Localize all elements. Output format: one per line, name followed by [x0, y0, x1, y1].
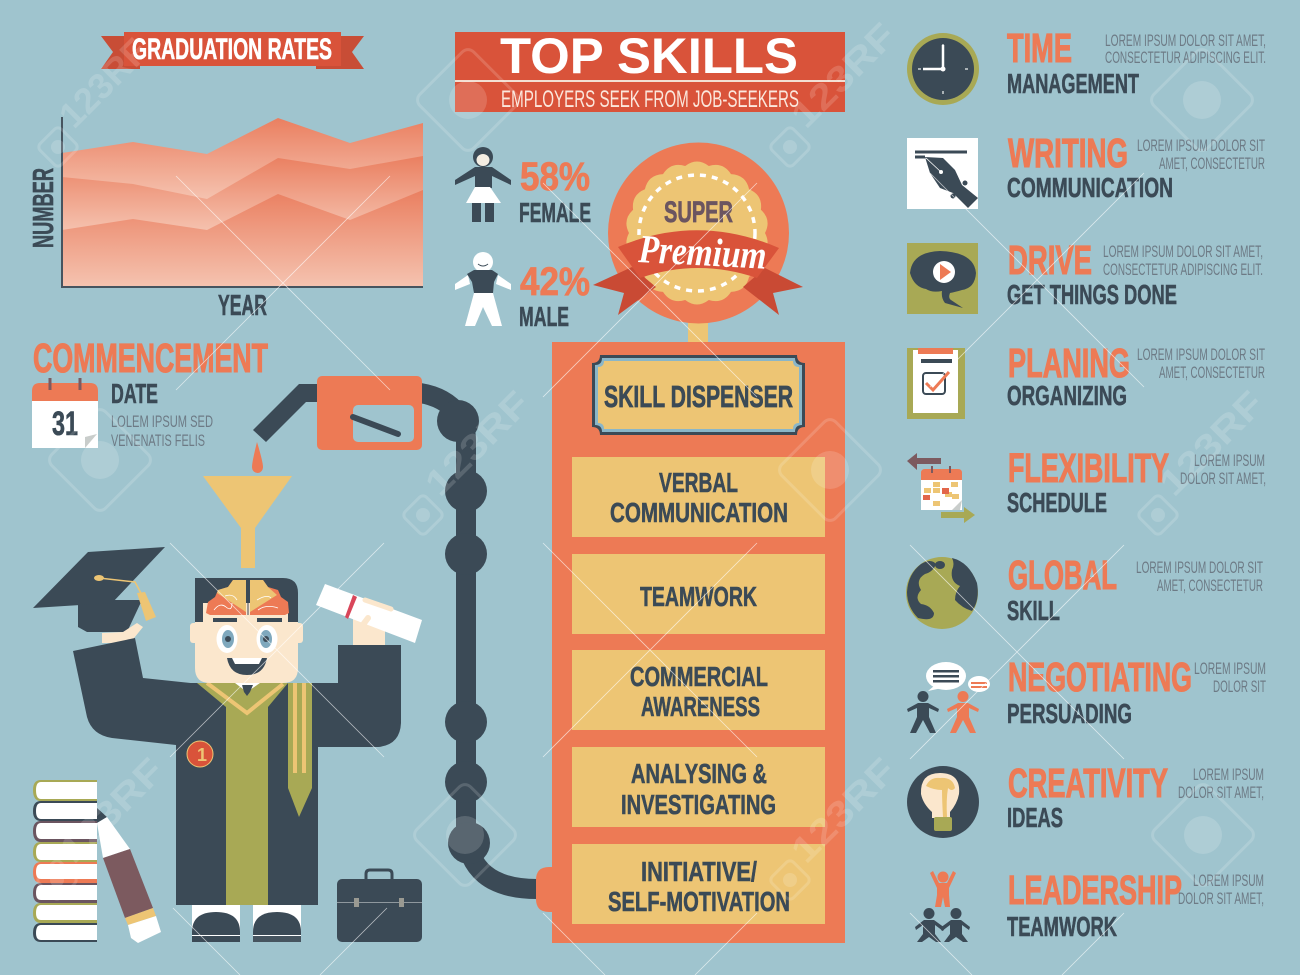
skill row: flexibility schedule	[907, 445, 1266, 523]
skill row: flexibility schedule: FLEXIBILITY	[1008, 445, 1169, 491]
skill row: negotiating persuading: PERSUADING	[1007, 698, 1132, 729]
skill row: drive get things done	[907, 237, 1263, 314]
icon: calendar 31: 31	[52, 405, 78, 443]
sign: skill dispenser: SKILL DISPENSER	[604, 379, 793, 414]
area chart: graduation rates: YEAR	[218, 290, 267, 322]
skill: commercial awareness: AWARENESS	[641, 691, 760, 722]
stat: female 58%	[455, 147, 591, 228]
banner: graduation rates	[101, 32, 364, 69]
icon: two people talking	[907, 662, 990, 733]
skill row: negotiating persuading: NEGOTIATING	[1008, 654, 1192, 700]
stock watermark overlay: 123RF	[783, 750, 904, 871]
robe	[73, 605, 401, 905]
commencement heading and date: VENENATIS FELIS	[111, 431, 205, 450]
skill: analysing and investigating	[572, 747, 825, 827]
skill row: planing organizing	[907, 340, 1265, 419]
icon: calendar with arrows	[907, 453, 975, 523]
stock watermark overlay: 123RF	[417, 383, 538, 504]
skill: teamwork	[572, 554, 825, 634]
stock watermark overlay: 123RF	[783, 15, 904, 136]
fuel nozzle	[253, 376, 422, 450]
skill row: negotiating persuading	[907, 654, 1266, 733]
skill row: drive get things done: GET THINGS DONE	[1007, 279, 1177, 310]
drop	[252, 442, 263, 473]
stock watermark overlay: 123RF	[51, 750, 172, 871]
sign: skill dispenser	[592, 355, 805, 435]
stock watermark overlay: 123RF	[1151, 383, 1272, 504]
commencement heading and date: COMMENCEMENT	[33, 335, 268, 381]
skill: analysing and investigating: ANALYSING &	[631, 758, 767, 789]
head with brain	[190, 578, 303, 696]
stack of books	[33, 780, 97, 942]
title panel: top skills: EMPLOYERS SEEK FROM JOB-SEEKERS	[501, 86, 799, 113]
icon: globe	[906, 557, 978, 629]
skill: initiative self-motivation: INITIATIVE/	[641, 856, 757, 887]
icon: clock	[907, 33, 979, 105]
skill: commercial awareness: COMMERCIAL	[630, 661, 768, 692]
pencil	[97, 808, 161, 943]
shoes	[192, 905, 301, 942]
title panel: top skills: TOP SKILLS	[500, 28, 798, 84]
graduate character	[33, 547, 422, 942]
skill row: global skill: GLOBAL	[1008, 552, 1117, 598]
skill row: creativity ideas	[907, 760, 1264, 838]
brain	[206, 580, 289, 615]
icon: calendar 31	[32, 378, 98, 448]
badge: super premium: SUPER	[664, 196, 733, 229]
skill row: leadership teamwork: LEADERSHIP	[1008, 867, 1182, 913]
skill row: creativity ideas: CREATIVITY	[1008, 760, 1168, 806]
icon: light bulb	[907, 766, 979, 838]
stock watermark overlay: 123RF	[51, 30, 156, 136]
area chart: graduation rates	[28, 117, 423, 322]
skill row: writing communication	[907, 130, 1265, 209]
skill row: creativity ideas: IDEAS	[1007, 802, 1063, 833]
banner: graduation rates: GRADUATION RATES	[132, 33, 332, 66]
skill row: leadership teamwork	[915, 867, 1264, 942]
skill row: drive get things done: DRIVE	[1008, 237, 1092, 283]
skill row: planing organizing: ORGANIZING	[1007, 380, 1127, 411]
fuel hose	[420, 393, 552, 912]
skill: verbal communication	[572, 457, 825, 537]
skill row: leadership teamwork: TEAMWORK	[1007, 911, 1117, 942]
skill: verbal communication: COMMUNICATION	[610, 497, 788, 528]
icon: clipboard	[907, 348, 965, 419]
skill row: global skill	[906, 552, 1263, 629]
skill row: time management	[907, 25, 1266, 105]
stat: male 42%: 42%	[520, 260, 590, 304]
skill row: time management: TIME	[1007, 25, 1072, 71]
stat: female 58%: FEMALE	[519, 197, 591, 228]
commencement heading and date: LOLEM IPSUM SED	[111, 412, 213, 431]
skill: initiative self-motivation: SELF-MOTIVATION	[608, 886, 790, 917]
panel: skill dispenser	[552, 342, 845, 943]
stat: male 42%	[455, 252, 590, 332]
robe: 1	[197, 745, 207, 765]
funnel	[203, 476, 292, 568]
title panel: top skills	[455, 28, 845, 113]
skill: initiative self-motivation	[572, 844, 825, 924]
skill row: global skill: SKILL	[1007, 595, 1060, 626]
stat: female 58%: 58%	[520, 155, 590, 199]
skill row: flexibility schedule: SCHEDULE	[1007, 487, 1107, 518]
icon: pen nib	[907, 138, 978, 209]
skill row: writing communication: COMMUNICATION	[1007, 172, 1173, 203]
briefcase	[337, 870, 422, 942]
stat: male 42%: MALE	[519, 301, 569, 332]
skill row: planing organizing: PLANING	[1008, 340, 1130, 386]
badge: super premium	[593, 142, 803, 344]
diploma	[316, 584, 422, 643]
skill row: writing communication: WRITING	[1008, 130, 1128, 176]
skill: analysing and investigating: INVESTIGATING	[621, 789, 776, 820]
area chart: graduation rates: NUMBER	[28, 168, 60, 248]
skill: commercial awareness	[572, 650, 825, 730]
graduation cap	[33, 547, 165, 632]
skill row: time management: MANAGEMENT	[1007, 68, 1139, 99]
icon: team lifting leader	[915, 871, 970, 942]
skill: teamwork: TEAMWORK	[640, 581, 757, 612]
skill: verbal communication: VERBAL	[659, 467, 738, 498]
commencement heading and date	[32, 335, 268, 450]
icon: brain play	[907, 243, 978, 314]
badge: super premium: Premium	[637, 226, 768, 278]
commencement heading and date: DATE	[111, 378, 158, 409]
